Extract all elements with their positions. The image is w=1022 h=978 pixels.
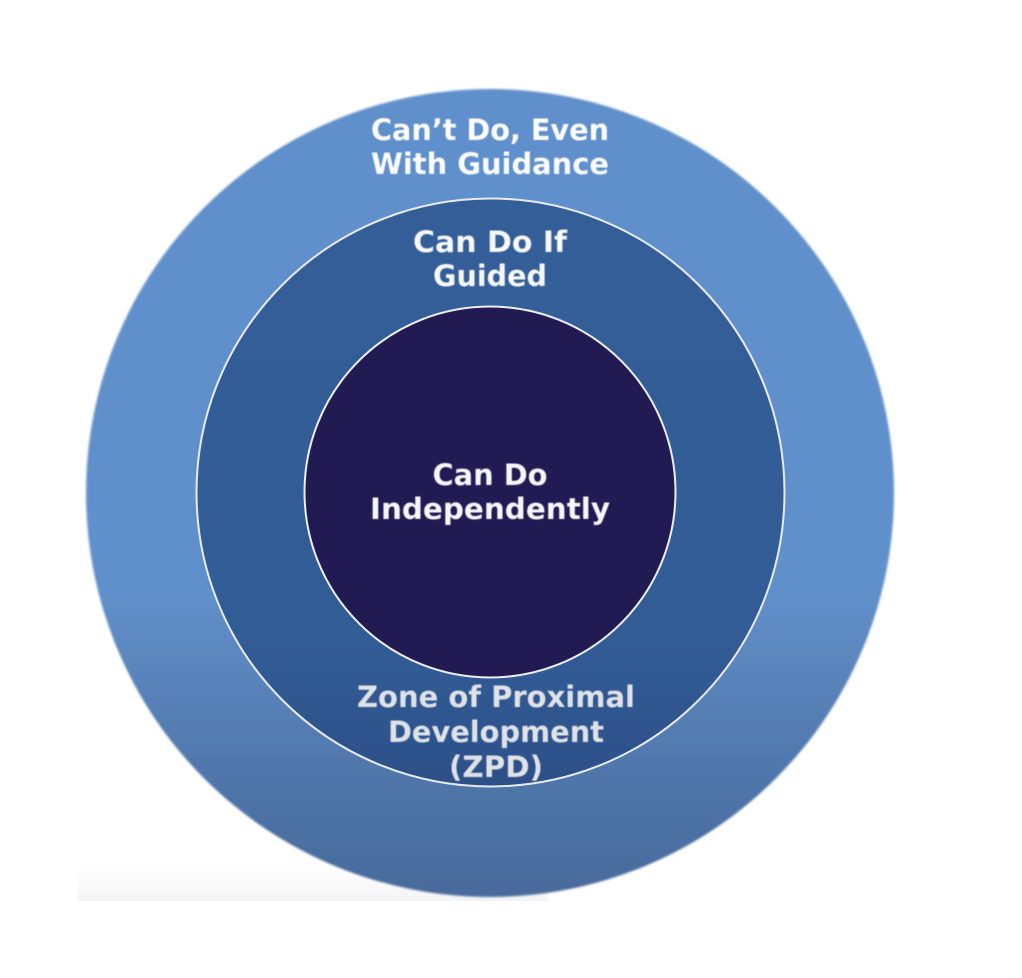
label: zone of proximal development (ZPD) [357, 680, 635, 784]
outer circle: can't do, even with guidance [86, 89, 894, 897]
label: zone of proximal development (ZPD): (ZPD) [449, 750, 543, 784]
label: can't do, even with guidance [371, 113, 609, 181]
middle circle: zone of proximal development [196, 198, 784, 786]
label: zone of proximal development (ZPD): Development [388, 715, 604, 749]
label: can do independently [370, 458, 610, 526]
label: can't do, even with guidance: Can’t Do, Even [371, 113, 609, 147]
bottom-left shadow band [78, 860, 548, 901]
label: can do independently: Independently [370, 492, 610, 526]
label: can do independently: Can Do [432, 458, 548, 492]
label: can do if guided [413, 225, 567, 293]
inner circle: can do independently [304, 306, 676, 678]
label: can do if guided: Can Do If [413, 225, 567, 259]
label: zone of proximal development (ZPD): Zone of Proximal [357, 680, 635, 714]
label: can do if guided: Guided [433, 259, 547, 293]
label: can't do, even with guidance: With Guidance [371, 147, 609, 181]
